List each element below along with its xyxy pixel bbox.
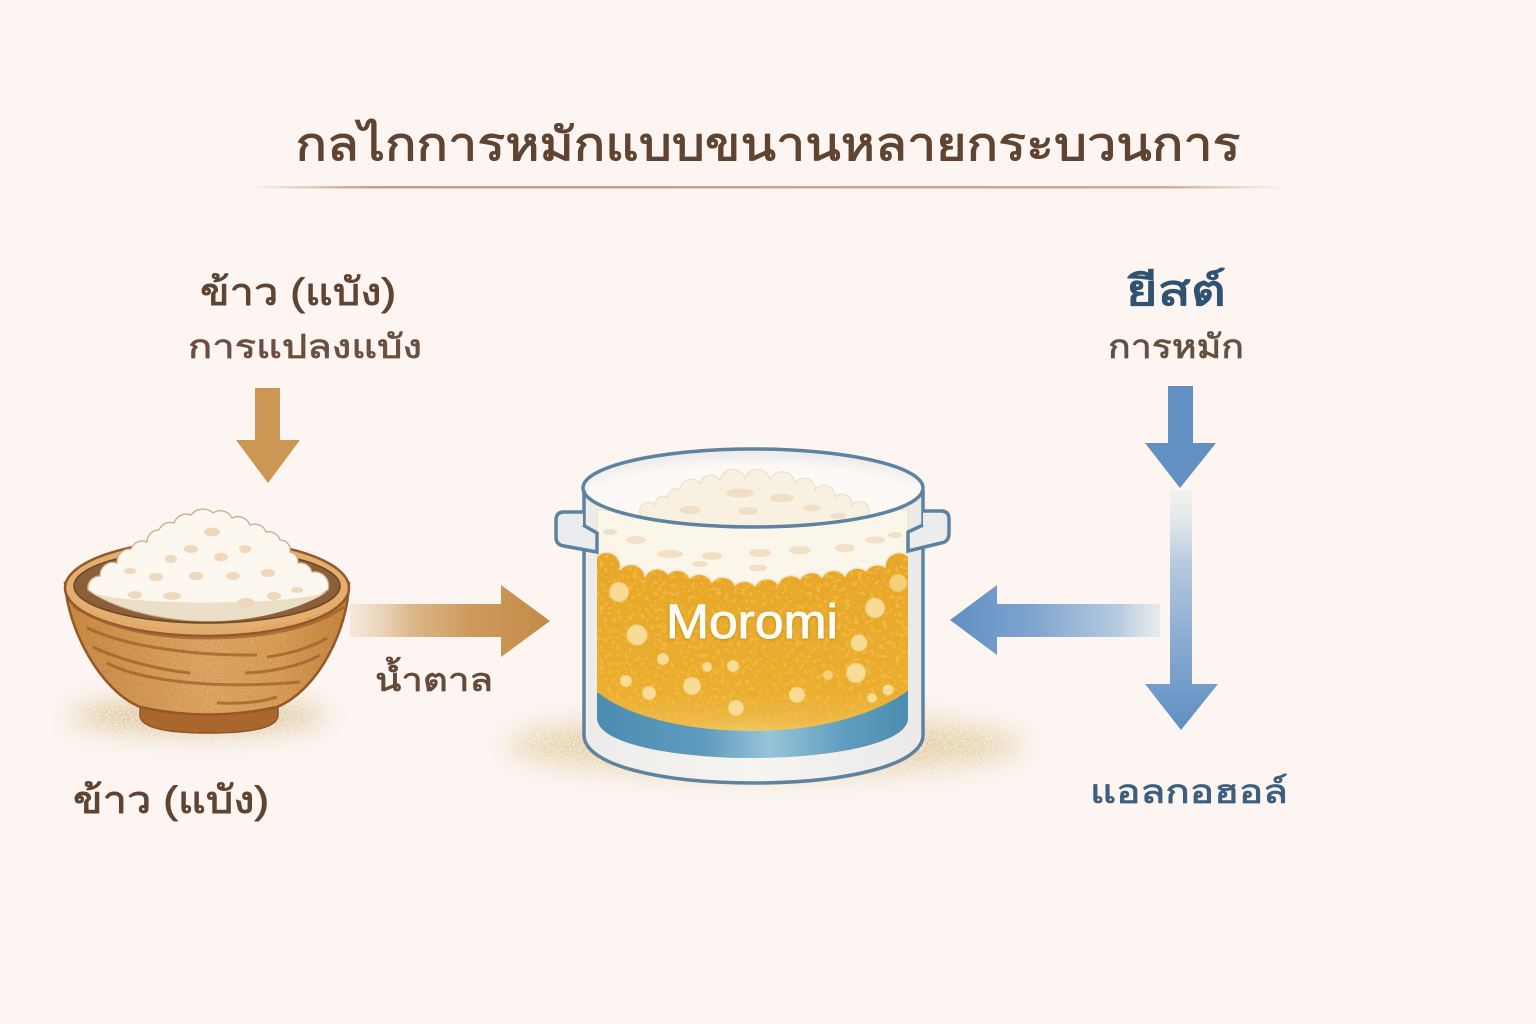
label: alcohol: แอลกอฮอล์: [1090, 773, 1288, 810]
label: Moromi: Moromi: [666, 596, 838, 649]
pot outline and handles: [556, 449, 949, 783]
rice mound inside pot: [640, 469, 869, 530]
label: yeast: [1108, 267, 1244, 365]
label: sugar: น้ำตาล: [375, 657, 493, 698]
title: กลไกการหมักแบบขนานหลายกระบวนการ: [296, 118, 1240, 170]
label: rice starch bottom: ข้าว (แบัง): [73, 780, 269, 822]
label: rice starch top: [188, 272, 422, 365]
label: rice starch top: ข้าว (แบัง): [200, 272, 396, 314]
arrow: rice to moromi: [350, 585, 550, 657]
arrow: saccharification down: [236, 388, 300, 483]
icon: moromi fermentation pot: [507, 449, 1023, 783]
arrow: yeast fermentation down: [1145, 386, 1216, 488]
label: yeast: ยีสต์: [1126, 267, 1226, 314]
foam layer: [597, 510, 908, 586]
arrow: down to alcohol: [1145, 490, 1218, 730]
label: rice starch top: การแปลงแบัง: [188, 328, 422, 365]
arrow: left to moromi: [950, 585, 1160, 655]
liquid: [597, 553, 908, 758]
label: yeast: การหมัก: [1108, 328, 1244, 365]
icon: rice bowl: [60, 509, 355, 733]
